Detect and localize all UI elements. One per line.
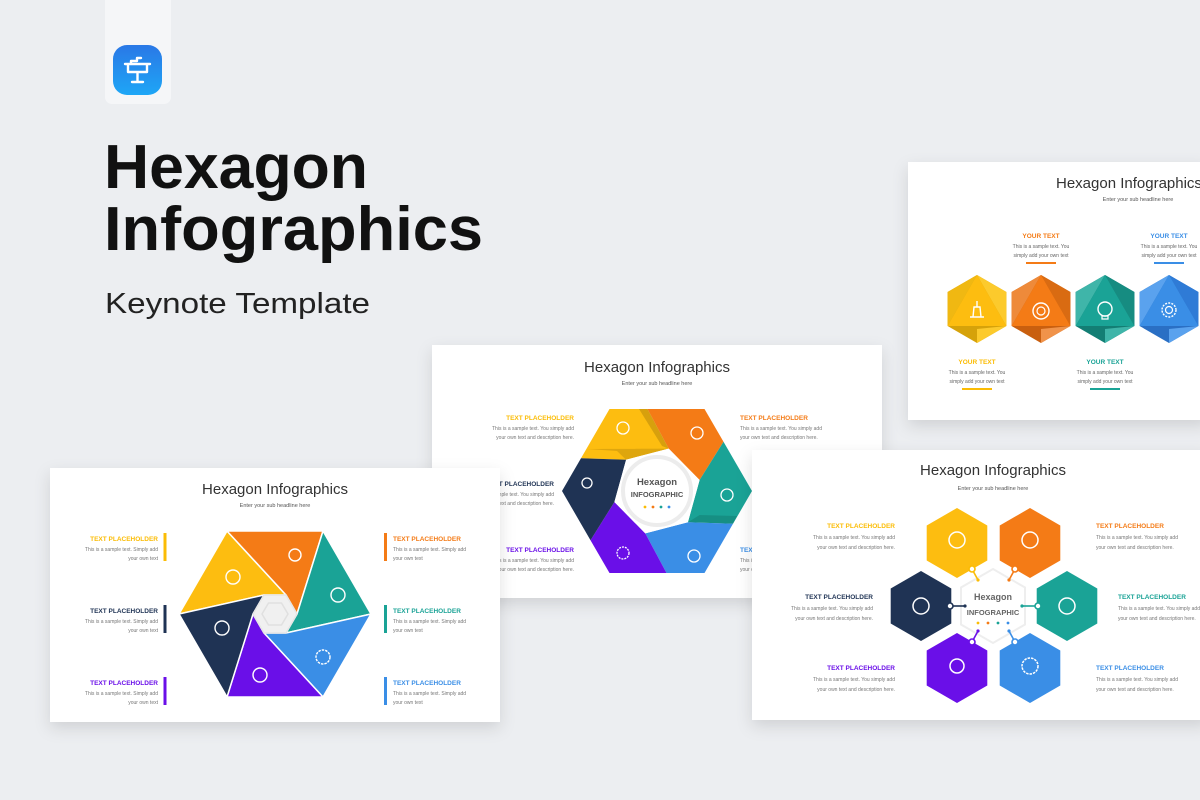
- text blocks: left and right: your own text and description here.: [476, 501, 554, 507]
- text blocks: left and right: This is a sample text. You simply add: [492, 426, 574, 432]
- text blocks: right: This is a sample text. Simply add: [393, 619, 466, 625]
- slide D: faceted hexagons: [908, 162, 1200, 420]
- icon: keynote app: [113, 45, 162, 95]
- text blocks: TEXT PLACEHOLDER: [827, 665, 895, 672]
- slide C: connected hexagons: Hexagon Infographics: [920, 462, 1066, 479]
- text block: orange: simply add your own text: [1013, 253, 1069, 259]
- text block: orange: simply add your own text: [949, 379, 1005, 385]
- text blocks: TEXT PLACEHOLDER: [805, 594, 873, 601]
- main title: Hexagon: [104, 133, 368, 202]
- slide C: connected hexagons: Enter your sub headline here: [958, 486, 1028, 492]
- slide A: pinwheel hexagon: Hexagon Infographics: [202, 481, 348, 498]
- app badge card: [105, 0, 171, 104]
- text blocks: left: This is a sample text. Simply add: [85, 691, 158, 697]
- faceted hexagon: orange: [1012, 275, 1070, 343]
- text blocks: right: This is a sample text. Simply add: [393, 691, 466, 697]
- spiral hexagon chart: Hexagon: [637, 477, 677, 488]
- text blocks: left: your own text: [128, 700, 159, 706]
- text blocks: [791, 523, 1200, 693]
- text blocks: TEXT PLACEHOLDER: [1096, 665, 1164, 672]
- text block: orange: This is a sample text. You: [1077, 370, 1134, 376]
- text blocks: left: TEXT PLACEHOLDER: [90, 680, 158, 687]
- center hexagon: [961, 569, 1025, 643]
- text blocks: your own text and description here.: [1096, 687, 1174, 693]
- slide B: spiral hexagon: Enter your sub headline here: [622, 381, 692, 387]
- text blocks: left: This is a sample text. Simply add: [85, 619, 158, 625]
- text blocks: right: TEXT PLACEHOLDER: [393, 680, 461, 687]
- text blocks: This is a sample text. You simply add: [1096, 535, 1178, 541]
- text block: orange: simply add your own text: [1077, 379, 1133, 385]
- text blocks: left: your own text: [128, 556, 159, 562]
- text blocks: left and right: [472, 415, 822, 573]
- text block: orange: [949, 233, 1198, 390]
- text blocks: TEXT PLACEHOLDER: [1096, 523, 1164, 530]
- outer hexagons: [891, 508, 1097, 703]
- faceted hexagon: yellow: [948, 275, 1006, 343]
- text blocks: right: your own text: [393, 628, 423, 634]
- pinwheel hexagon chart: [179, 531, 371, 697]
- text blocks: your own text and description here.: [1096, 545, 1174, 551]
- text block: orange: YOUR TEXT: [1022, 233, 1060, 240]
- text blocks: This is a sample text. You simply add: [813, 677, 895, 683]
- text block: orange: YOUR TEXT: [1086, 359, 1124, 366]
- text blocks: right: TEXT PLACEHOLDER: [393, 608, 461, 615]
- text blocks: left: [85, 533, 166, 706]
- text block: orange: This is a sample text. You: [1013, 244, 1070, 250]
- faceted hexagon: blue: [1140, 275, 1198, 343]
- text blocks: This is a sample text. You simply add: [791, 606, 873, 612]
- center hexagon: INFOGRAPHIC: [967, 608, 1020, 617]
- text blocks: right: [384, 533, 466, 706]
- text blocks: left and right: This is a sample text. You simply add: [472, 492, 554, 498]
- text blocks: left and right: your own text and description here.: [740, 567, 818, 573]
- slide D: faceted hexagons: Enter your sub headline here: [1103, 197, 1173, 203]
- text blocks: This is a sample text. You simply add: [813, 535, 895, 541]
- text blocks: left and right: your own text and description here.: [496, 567, 574, 573]
- text blocks: left: TEXT PLACEHOLDER: [90, 608, 158, 615]
- text blocks: your own text and description here.: [817, 687, 895, 693]
- text blocks: left and right: TEXT PLACEHOLDER: [486, 481, 554, 488]
- text blocks: TEXT PLACEHOLDER: [827, 523, 895, 530]
- faceted hexagon: teal: [1076, 275, 1134, 343]
- slide B: spiral hexagon: Hexagon Infographics: [584, 359, 730, 376]
- text blocks: your own text and description here.: [795, 616, 873, 622]
- text blocks: left and right: your own text and description here.: [496, 435, 574, 441]
- text blocks: TEXT PLACEHOLDER: [1118, 594, 1186, 601]
- text blocks: left and right: TEXT PLACEHOLDER: [506, 547, 574, 554]
- main title: Infographics: [104, 195, 483, 264]
- text blocks: left: This is a sample text. Simply add: [85, 547, 158, 553]
- text block: orange: YOUR TEXT: [1150, 233, 1188, 240]
- text block: orange: YOUR TEXT: [958, 359, 996, 366]
- text blocks: right: TEXT PLACEHOLDER: [393, 536, 461, 543]
- text blocks: left and right: TEXT PLACEHOLDER: [506, 415, 574, 422]
- text block: orange: This is a sample text. You: [949, 370, 1006, 376]
- text block: orange: This is a sample text. You: [1141, 244, 1198, 250]
- slide B: spiral hexagon: [432, 345, 882, 598]
- slide A: pinwheel hexagon: [50, 468, 500, 722]
- center hexagon: Hexagon: [974, 592, 1012, 602]
- text blocks: left and right: your own text and description here.: [740, 435, 818, 441]
- text blocks: right: your own text: [393, 700, 423, 706]
- text block: orange: simply add your own text: [1141, 253, 1197, 259]
- text blocks: left: TEXT PLACEHOLDER: [90, 536, 158, 543]
- text blocks: left: your own text: [128, 628, 159, 634]
- slide C: connected hexagons: [752, 450, 1200, 720]
- slide D: faceted hexagons: Hexagon Infographics: [1056, 175, 1200, 192]
- text blocks: This is a sample text. You simply add: [1118, 606, 1200, 612]
- connectors: [947, 566, 1041, 645]
- text blocks: left and right: This is a sample text. You simply add: [492, 558, 574, 564]
- main title: [104, 133, 483, 264]
- subtitle: Keynote Template: [105, 288, 370, 320]
- spiral hexagon chart: INFOGRAPHIC: [631, 490, 684, 499]
- spiral hexagon chart: [562, 409, 752, 573]
- text blocks: right: your own text: [393, 556, 423, 562]
- text blocks: your own text and description here.: [817, 545, 895, 551]
- text blocks: left and right: TEXT PLACEHOLDER: [740, 547, 808, 554]
- text blocks: left and right: This is a sample text. You simply add: [740, 558, 822, 564]
- slide A: pinwheel hexagon: Enter your sub headline here: [240, 503, 310, 509]
- text blocks: left and right: TEXT PLACEHOLDER: [740, 415, 808, 422]
- text blocks: This is a sample text. You simply add: [1096, 677, 1178, 683]
- text blocks: right: This is a sample text. Simply add: [393, 547, 466, 553]
- text blocks: your own text and description here.: [1118, 616, 1196, 622]
- text blocks: left and right: This is a sample text. You simply add: [740, 426, 822, 432]
